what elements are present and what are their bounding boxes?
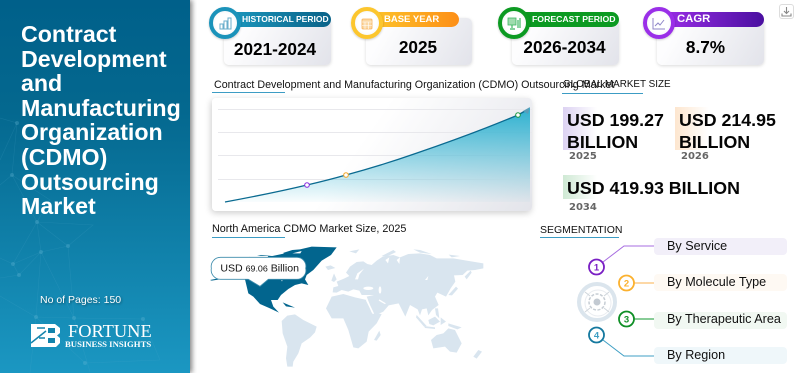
- metric: 2025 market size: BILLION: [567, 132, 638, 152]
- title: Contract: [21, 21, 116, 47]
- value: 2021-2024: [234, 39, 316, 59]
- badge 3: [619, 312, 634, 326]
- icon: monitor chart: [508, 18, 521, 30]
- badge 4: 4: [594, 330, 600, 342]
- logo wordmark: FORTUNE: [68, 321, 152, 341]
- icon: bars: [220, 18, 232, 30]
- panel: title sidebar: [0, 0, 190, 373]
- metric: 2034 market size: 2034: [569, 202, 597, 213]
- logo tagline: BUSINESS INSIGHTS: [65, 339, 151, 349]
- stat: historical period: [208, 7, 332, 67]
- stat: CAGR: [642, 7, 765, 67]
- title: and: [21, 70, 62, 96]
- callout: North America value: USD 69.06 Billion: [220, 264, 299, 275]
- central hub icon: [579, 284, 615, 320]
- diagram: segmentation connectors and badges: [577, 246, 654, 356]
- metric: 2025 market size: [563, 107, 664, 162]
- title: Organization: [21, 119, 163, 145]
- logo mark: [31, 324, 60, 347]
- metric: 2026 market size: BILLION: [679, 132, 750, 152]
- stat: forecast period: [497, 7, 620, 67]
- panel: growth chart: [212, 98, 532, 211]
- badge 1: 1: [594, 262, 600, 274]
- value: 8.7%: [686, 37, 725, 57]
- label pill: HISTORICAL PERIOD: [242, 14, 329, 24]
- card: [224, 18, 331, 65]
- segment: by molecule type: By Molecule Type: [667, 275, 766, 289]
- card: [657, 18, 764, 65]
- segment: by therapeutic area: By Therapeutic Area: [667, 312, 781, 326]
- segment: by molecule type: [654, 274, 787, 291]
- icon ring: [498, 7, 530, 39]
- label pill: BASE YEAR: [384, 14, 439, 25]
- stat: base year: [350, 7, 473, 67]
- heading: market chart: Contract Development and Manufacturing Organization (CDMO) Outsourcing Market: [214, 79, 614, 91]
- value: 2025: [399, 37, 437, 57]
- title: Development: [21, 46, 167, 72]
- metric: 2025 market size: USD 199.27: [567, 110, 664, 130]
- metric: 2025 market size: 2025: [569, 151, 597, 162]
- metric: 2026 market size: 2026: [681, 151, 709, 162]
- label pill: [664, 12, 764, 27]
- label pill: [230, 12, 331, 27]
- icon: download button: [779, 4, 794, 19]
- title: [21, 21, 181, 219]
- logo: Fortune Business Insights: [31, 321, 152, 349]
- world map: [210, 246, 484, 367]
- metric: 2026 market size: [675, 107, 776, 162]
- title: Market: [21, 193, 96, 219]
- icon ring: [209, 7, 241, 39]
- card: [512, 18, 619, 65]
- page count: No of Pages: 150: [40, 294, 121, 306]
- card: [366, 18, 472, 65]
- badge 2: 2: [624, 278, 629, 290]
- badge 2: [619, 276, 634, 290]
- segment: by service: [654, 238, 787, 255]
- badge 4: [589, 328, 604, 342]
- area chart: [218, 107, 530, 203]
- icon ring: [643, 7, 675, 39]
- label pill: [519, 12, 619, 27]
- metric: 2026 market size: USD 214.95: [679, 110, 776, 130]
- metric: 2034 market size: USD 419.93 BILLION: [567, 178, 740, 198]
- badge 1: [589, 260, 604, 274]
- icon ring: [351, 7, 383, 39]
- icon: growth chart: [652, 18, 665, 30]
- title: (CDMO): [21, 144, 107, 170]
- label pill: [372, 12, 459, 27]
- segment: by region: [654, 347, 787, 364]
- callout: North America value: [211, 257, 306, 286]
- heading: regional map: North America CDMO Market Size, 2025: [212, 223, 406, 235]
- icon: calendar: [362, 18, 372, 30]
- label pill: CAGR: [677, 13, 710, 25]
- value: 2026-2034: [523, 37, 606, 57]
- title: Manufacturing: [21, 95, 181, 121]
- segment: by service: By Service: [667, 239, 727, 253]
- segment: by region: By Region: [667, 348, 725, 362]
- metric: 2034 market size: [563, 175, 740, 213]
- point: 2025: [305, 183, 309, 187]
- label pill: FORECAST PERIOD: [532, 14, 616, 24]
- title: Outsourcing: [21, 169, 159, 195]
- point: 2026: [344, 173, 348, 177]
- heading: segmentation: SEGMENTATION: [540, 224, 622, 236]
- network background pattern: [0, 118, 160, 372]
- heading: global market size: GLOBAL MARKET SIZE: [563, 79, 671, 90]
- badge 3: 3: [624, 314, 629, 326]
- point: 2034: [516, 113, 520, 117]
